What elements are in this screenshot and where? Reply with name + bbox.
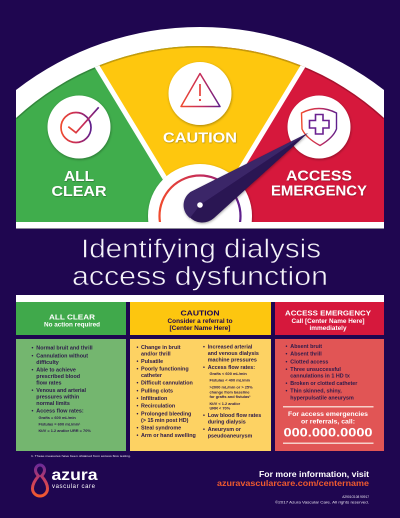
caution right column: pseudoaneurysm	[208, 434, 253, 440]
caution left column: catheter	[141, 373, 163, 379]
access emergency header	[275, 302, 384, 335]
access emergency header: immediately	[310, 325, 347, 332]
caution gauge label: CAUTION	[163, 130, 237, 146]
caution left column: (> 15 min post HD)	[141, 418, 189, 424]
caution right column: Kt/V < 1.2 and/or	[210, 401, 241, 406]
emergency call callout	[283, 406, 374, 444]
panel: caution	[130, 302, 271, 451]
icon: warning triangle badge	[168, 62, 232, 125]
caution header: CAUTION	[180, 308, 220, 318]
caution left column: •	[136, 359, 138, 365]
emergency call callout: For access emergencies	[288, 411, 369, 418]
access emergency body: Absent thrill	[290, 352, 322, 358]
gauge needle	[184, 133, 308, 223]
all clear body: difficulty	[36, 360, 59, 366]
all clear gauge label: CLEAR	[52, 184, 107, 200]
all clear body: •	[32, 368, 34, 374]
icon: check mark badge	[48, 96, 110, 158]
all clear header	[16, 302, 126, 335]
caution right column: change from baseline	[210, 390, 250, 394]
caution left column: •	[136, 426, 138, 432]
vascular care wordmark: vascular care	[52, 484, 96, 490]
caution left column	[136, 345, 196, 439]
caution left column: Pulling clots	[141, 388, 173, 394]
caution left column: and/or thrill	[141, 351, 171, 357]
icon: azura loop	[32, 465, 48, 496]
more information line: For more information, visit	[259, 470, 369, 479]
all clear body: Venous and arterial	[36, 388, 87, 394]
access emergency body: •	[286, 381, 288, 387]
access emergency gauge label	[271, 168, 367, 200]
caution right column: URR < 70%	[210, 406, 231, 410]
caution left column: Pulsatile	[141, 359, 163, 365]
caution right column: Increased arterial	[208, 344, 253, 350]
emergency call callout: 000.000.0000	[284, 425, 373, 439]
all clear body: normal limits	[36, 401, 70, 407]
caution left column: Prolonged bleeding	[141, 412, 191, 418]
caution right column: •	[203, 365, 205, 371]
access emergency body: •	[286, 352, 288, 358]
caution right column: Fistulas < 400 mL/min	[210, 378, 251, 382]
gauge bottom edge	[16, 228, 384, 229]
access emergency body: •	[286, 367, 288, 373]
caution left column: •	[136, 433, 138, 439]
caution body	[130, 339, 271, 451]
caution left column: Difficult cannulation	[141, 381, 193, 387]
footnote: 1. These measures have been obtained from access flow testing.	[31, 454, 131, 458]
caution left column: Steal syndrome	[141, 426, 181, 432]
access emergency body: •	[286, 389, 288, 395]
hub dial	[147, 164, 254, 222]
caution header	[130, 302, 271, 335]
caution right column: for grafts and fistulas¹	[210, 394, 251, 399]
caution left column: Change in bruit	[141, 345, 181, 351]
caution left column: •	[136, 381, 138, 387]
all clear body: •	[32, 408, 34, 414]
caution left column: •	[136, 396, 138, 402]
all clear body: pressures within	[36, 394, 79, 400]
caution left column: •	[136, 345, 138, 351]
all clear body	[16, 339, 126, 451]
title: access dysfunction	[72, 263, 328, 291]
caution right column	[203, 344, 261, 440]
gauge white frame	[16, 27, 384, 228]
all clear header: ALL CLEAR	[49, 312, 96, 322]
all clear header: No action required	[44, 321, 100, 328]
access emergency gauge label: EMERGENCY	[271, 184, 367, 200]
white strip above panels	[16, 295, 384, 302]
caution left column: Infiltration	[141, 396, 167, 402]
caution left column: Recirculation	[141, 404, 175, 410]
title	[72, 235, 328, 291]
contact block	[217, 470, 369, 504]
access emergency header: ACCESS EMERGENCY	[285, 308, 371, 318]
caution right column: and venous dialysis	[208, 351, 259, 357]
all clear body: Normal bruit and thrill	[36, 346, 93, 352]
gauge	[16, 27, 384, 229]
access emergency header: Call [Center Name Here]	[292, 318, 364, 325]
all clear body: Fistulas = 600 mL/min¹	[38, 421, 81, 426]
caution right column: •	[203, 413, 205, 419]
caution right column: machine pressures	[208, 357, 257, 363]
caution left column: Arm or hand swelling	[141, 433, 196, 439]
all clear body: Grafts = 600 mL/min	[38, 415, 76, 420]
copyright: ©2017 Azura Vascular Care. All rights reserved.	[275, 500, 369, 504]
caution right column: Aneurysm or	[208, 427, 242, 433]
all clear body: •	[32, 388, 34, 394]
access emergency body: Broken or clotted catheter	[290, 381, 358, 387]
caution left column: Poorly functioning	[141, 367, 189, 373]
logo	[32, 465, 98, 496]
caution header: Consider a referral to	[168, 318, 233, 325]
panel: access emergency	[275, 302, 384, 451]
access emergency body	[275, 339, 384, 451]
access emergency body: Three unsuccessful	[290, 367, 341, 373]
panel: all clear	[16, 302, 126, 451]
access emergency body: Thin skinned, shiny,	[290, 389, 342, 395]
access emergency gauge label: ACCESS	[286, 168, 352, 184]
all clear body: •	[32, 354, 34, 360]
title: Identifying dialysis	[81, 235, 321, 263]
caution right column: >2000 mL/min or > 25%	[210, 384, 253, 390]
all clear body: •	[32, 346, 34, 352]
all clear body: Cannulation without	[36, 354, 88, 360]
all clear gauge label: ALL	[64, 169, 94, 185]
emergency call callout: or referrals, call:	[301, 418, 355, 426]
caution right column: Low blood flow rates	[208, 413, 261, 419]
caution left column: •	[136, 388, 138, 394]
access emergency body: •	[286, 359, 288, 365]
all clear gauge label	[52, 169, 107, 200]
access emergency body: cannulations in 1 HD tx	[290, 373, 350, 379]
all clear body: Able to achieve	[36, 368, 76, 374]
all clear body: Access flow rates:	[36, 408, 84, 414]
caution right column: •	[203, 427, 205, 433]
document code: A2901O108 90917	[342, 495, 369, 499]
access emergency body: Clotted access	[290, 359, 328, 365]
caution left column: •	[136, 412, 138, 418]
azura wordmark: azura	[52, 467, 98, 484]
gauge colour wedges	[16, 46, 384, 222]
all clear body: Kt/V = 1.2 and/or URR = 70%	[38, 428, 91, 433]
caution left column: •	[136, 367, 138, 373]
caution right column: •	[203, 344, 205, 350]
caution right column: Access flow rates:	[208, 365, 255, 371]
caution right column: during dialysis	[208, 420, 246, 426]
all clear body: flow rates	[36, 380, 61, 386]
all clear body: prescribed blood	[36, 374, 80, 380]
caution left column: •	[136, 404, 138, 410]
access emergency body: hyperpulsatile aneurysm	[290, 395, 354, 401]
access emergency body: Absent bruit	[290, 344, 322, 350]
website url: azuravascularcare.com/centername	[217, 478, 369, 488]
access emergency body: •	[286, 344, 288, 350]
caution header: [Center Name Here]	[170, 325, 230, 332]
caution right column: Grafts < 600 mL/min	[210, 371, 247, 376]
icon: shield with cross badge	[288, 96, 350, 158]
